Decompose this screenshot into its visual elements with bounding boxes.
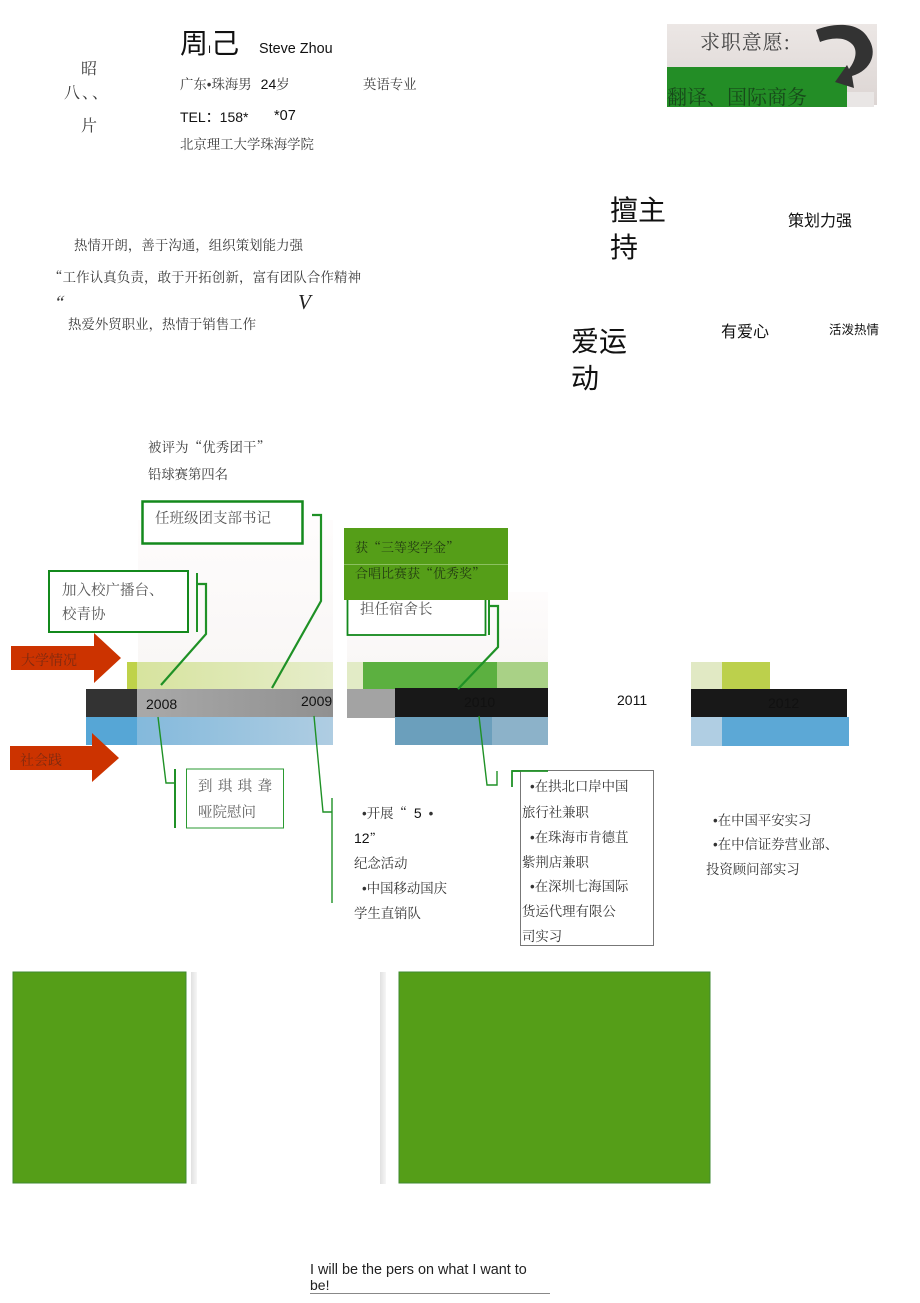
callout: scholarship panel: 获“三等奖学金” <box>355 537 459 556</box>
strengths keywords: 动 <box>571 363 599 394</box>
text block: 2012 internships <box>706 810 838 878</box>
self assessment text: “ <box>44 291 65 317</box>
timeline band: 2010 <box>464 694 495 710</box>
awards text <box>148 437 270 483</box>
timeline band: 2009 <box>301 693 332 709</box>
segment 2008-2009 <box>86 662 333 745</box>
photo placeholder: 片 <box>81 113 97 136</box>
text block: 2010 internships: 旅行社兼职 <box>522 802 590 821</box>
callout: scholarship panel <box>344 528 508 600</box>
segment 2010 <box>347 662 548 745</box>
callout: campus radio: 加入校广播台、 <box>62 579 164 600</box>
timeline band: 2012 <box>768 695 799 711</box>
photo placeholder <box>64 56 108 136</box>
arrow: university: 大学情况 <box>21 650 77 670</box>
photo placeholder: 八、、 <box>64 80 108 103</box>
motto: be! <box>310 1277 329 1293</box>
green panel right <box>399 972 710 1183</box>
callout: nursing home visit: 到琪琪聋 <box>198 775 272 796</box>
self assessment text: 热爱外贸职业，热情于销售工作 <box>68 314 256 333</box>
icon: curved arrow <box>816 25 873 88</box>
job objective panel <box>667 24 877 110</box>
awards text: 被评为“优秀团干” <box>148 437 270 456</box>
text block: 2009 practice <box>354 803 447 922</box>
text block: 2010 internships: 紫荆店兼职 <box>522 852 590 871</box>
photo placeholder: 昭 <box>81 56 97 79</box>
english name: Steve Zhou <box>259 41 333 57</box>
text block: 2010 internships: 司实习 <box>522 926 562 945</box>
text block: 2009 practice: •开展“ 5 • <box>362 803 434 822</box>
divider shade right <box>380 972 386 1184</box>
name: 周I己 <box>180 28 239 59</box>
callout connectors <box>158 515 548 903</box>
text block: 2009 practice: 学生直销队 <box>354 903 422 922</box>
text block: 2009 practice: •中国移动国庆 <box>362 878 447 897</box>
keyword: lively: 活泼热情 <box>829 323 879 337</box>
text block: 2010 internships: •在珠海市肯德苴 <box>530 827 628 846</box>
objective heading: 求职意愿: <box>700 26 790 55</box>
motto: I will be the pers on what I want to <box>310 1262 527 1278</box>
name and contact details <box>180 28 417 153</box>
objective value: 翻译、国际商务 <box>667 81 807 110</box>
callout: dorm head: 担任宿舍长 <box>360 598 432 619</box>
arrow: university <box>11 633 121 683</box>
keyword: hosting: 擅主 <box>610 195 666 226</box>
timeline band <box>86 662 849 746</box>
callout: nursing home visit <box>186 769 284 828</box>
year labels: 2008 <box>146 696 177 712</box>
keyword: sports: 爱运 <box>571 326 627 357</box>
strengths keywords <box>571 195 879 394</box>
major: 英语专业 <box>363 74 417 93</box>
arrow: social practice <box>10 733 119 782</box>
text block: 2012 internships: •在中信证券营业部、 <box>713 834 838 853</box>
segment 2012 <box>691 662 849 746</box>
callout: class league secretary <box>142 502 302 544</box>
callout: scholarship panel: 合唱比赛获“优秀奖” <box>355 563 485 582</box>
keyword: caring: 有爱心 <box>721 323 769 341</box>
arrow: social practice: 社会践 <box>20 750 62 770</box>
awards text: 铅球赛第四名 <box>148 464 228 483</box>
callout: nursing home visit: 哑院慰问 <box>198 801 256 822</box>
background tints <box>138 520 548 662</box>
text block: 2009 practice: 12” <box>354 830 382 847</box>
motto <box>310 1262 550 1294</box>
self assessment text <box>44 235 361 333</box>
divider shade left <box>191 972 197 1184</box>
telephone: TEL：158* <box>180 109 249 125</box>
self assessment text: 热情开朗，善于沟通，组织策划能力强 <box>74 235 304 254</box>
self assessment text: V <box>298 290 313 314</box>
callout: campus radio <box>49 571 188 632</box>
text block: 2010 internships: 货运代理有限公 <box>522 901 616 920</box>
strengths keywords: 持 <box>610 232 638 263</box>
text block: 2009 practice: 纪念活动 <box>354 853 408 872</box>
text block: 2012 internships: •在中国平安实习 <box>713 810 811 829</box>
callout: campus radio: 校青协 <box>62 603 106 624</box>
green panel left <box>13 972 186 1183</box>
text block: 2010 internships <box>512 770 654 946</box>
text block: 2010 internships: •在拱北口岸中国 <box>530 776 628 795</box>
timeline band: 2011 <box>617 692 647 708</box>
callout: dorm head <box>348 590 486 635</box>
keyword: planning: 策划力强 <box>788 212 852 230</box>
callout: class league secretary: 任班级团支部书记 <box>155 507 271 528</box>
telephone tail: *07 <box>274 108 296 124</box>
text block: 2012 internships: 投资顾问部实习 <box>706 859 800 878</box>
university: 北京理工大学珠海学院 <box>180 134 315 153</box>
self assessment text: “工作认真负责，敢于开拓创新，富有团队合作精神 <box>49 267 361 286</box>
location age: 广东•珠海男 24岁 <box>180 74 290 93</box>
text block: 2010 internships: •在深圳七海国际 <box>530 876 629 895</box>
